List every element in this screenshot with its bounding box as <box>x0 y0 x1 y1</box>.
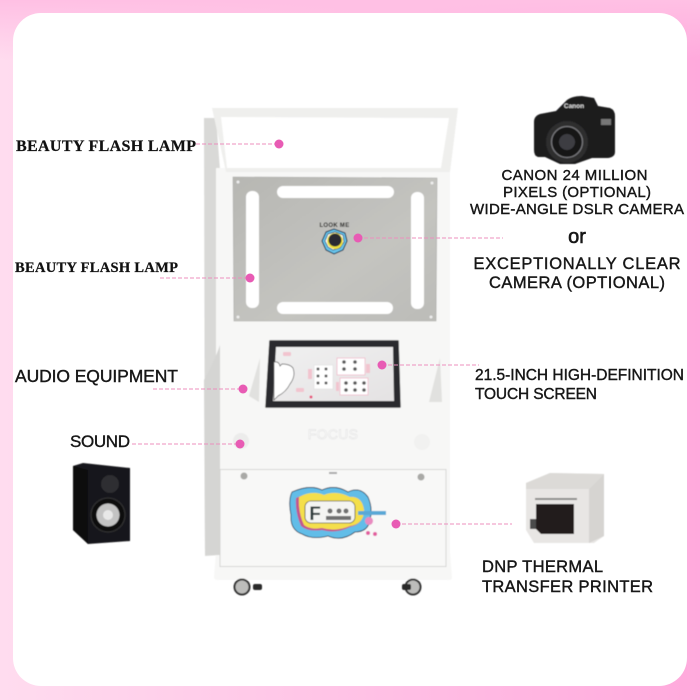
colourful sticker logo: F <box>309 504 321 525</box>
label: exceptionally clear camera: CAMERA (OPTIONAL) <box>489 274 665 292</box>
beauty flash lamp: top light box <box>221 117 449 168</box>
colourful sticker logo <box>290 487 386 538</box>
label: canon camera: PIXELS (OPTIONAL) <box>503 184 651 201</box>
canopy frame <box>212 108 458 172</box>
light slots <box>246 191 259 308</box>
touch screen <box>266 341 400 407</box>
steel mirror panel <box>233 177 437 321</box>
label: audio equipment: AUDIO EQUIPMENT <box>15 366 178 386</box>
icon: canon dslr camera: Canon <box>564 103 584 110</box>
printer drawer <box>220 470 446 566</box>
label: canon camera: CANON 24 MILLION <box>502 167 648 184</box>
look me camera lens: LOOK ME <box>319 223 350 229</box>
pink marker dots <box>236 140 400 528</box>
label: beauty flash lamp top: BEAUTY FLASH LAMP <box>16 138 196 155</box>
casters <box>234 580 420 594</box>
icon: dnp printer <box>526 473 604 543</box>
label: exceptionally clear camera <box>474 255 681 292</box>
label: touch screen: 21.5-INCH HIGH-DEFINITION <box>475 367 684 384</box>
look me camera lens <box>319 223 350 254</box>
label: dnp thermal transfer printer: DNP THERMAL <box>482 558 603 576</box>
label: dnp thermal transfer printer: TRANSFER PRINTER <box>482 578 653 596</box>
icon: studio speaker <box>73 463 130 544</box>
label: canon camera: WIDE-ANGLE DSLR CAMERA <box>470 201 684 218</box>
side speaker fins <box>249 358 260 402</box>
label: touch screen <box>475 367 684 403</box>
label: sound: SOUND <box>70 432 130 451</box>
label: canon camera <box>470 167 684 218</box>
screws <box>236 180 240 184</box>
speaker grilles <box>233 433 249 449</box>
booth left side shadow <box>204 118 220 556</box>
booth body <box>214 168 452 580</box>
cartoon rabbit <box>274 362 294 400</box>
label: exceptionally clear camera: EXCEPTIONALLY CLEAR <box>474 255 681 273</box>
icon: canon dslr camera <box>534 96 615 164</box>
photo booth machine <box>204 108 458 594</box>
template cards <box>314 365 333 389</box>
label: dnp thermal transfer printer <box>482 558 653 596</box>
label: or: or <box>568 226 586 248</box>
focus logo: FOCUS <box>308 426 358 442</box>
label: beauty flash lamp side: BEAUTY FLASH LAMP <box>15 260 178 276</box>
label: touch screen: TOUCH SCREEN <box>475 386 597 403</box>
leader lines <box>132 144 512 524</box>
